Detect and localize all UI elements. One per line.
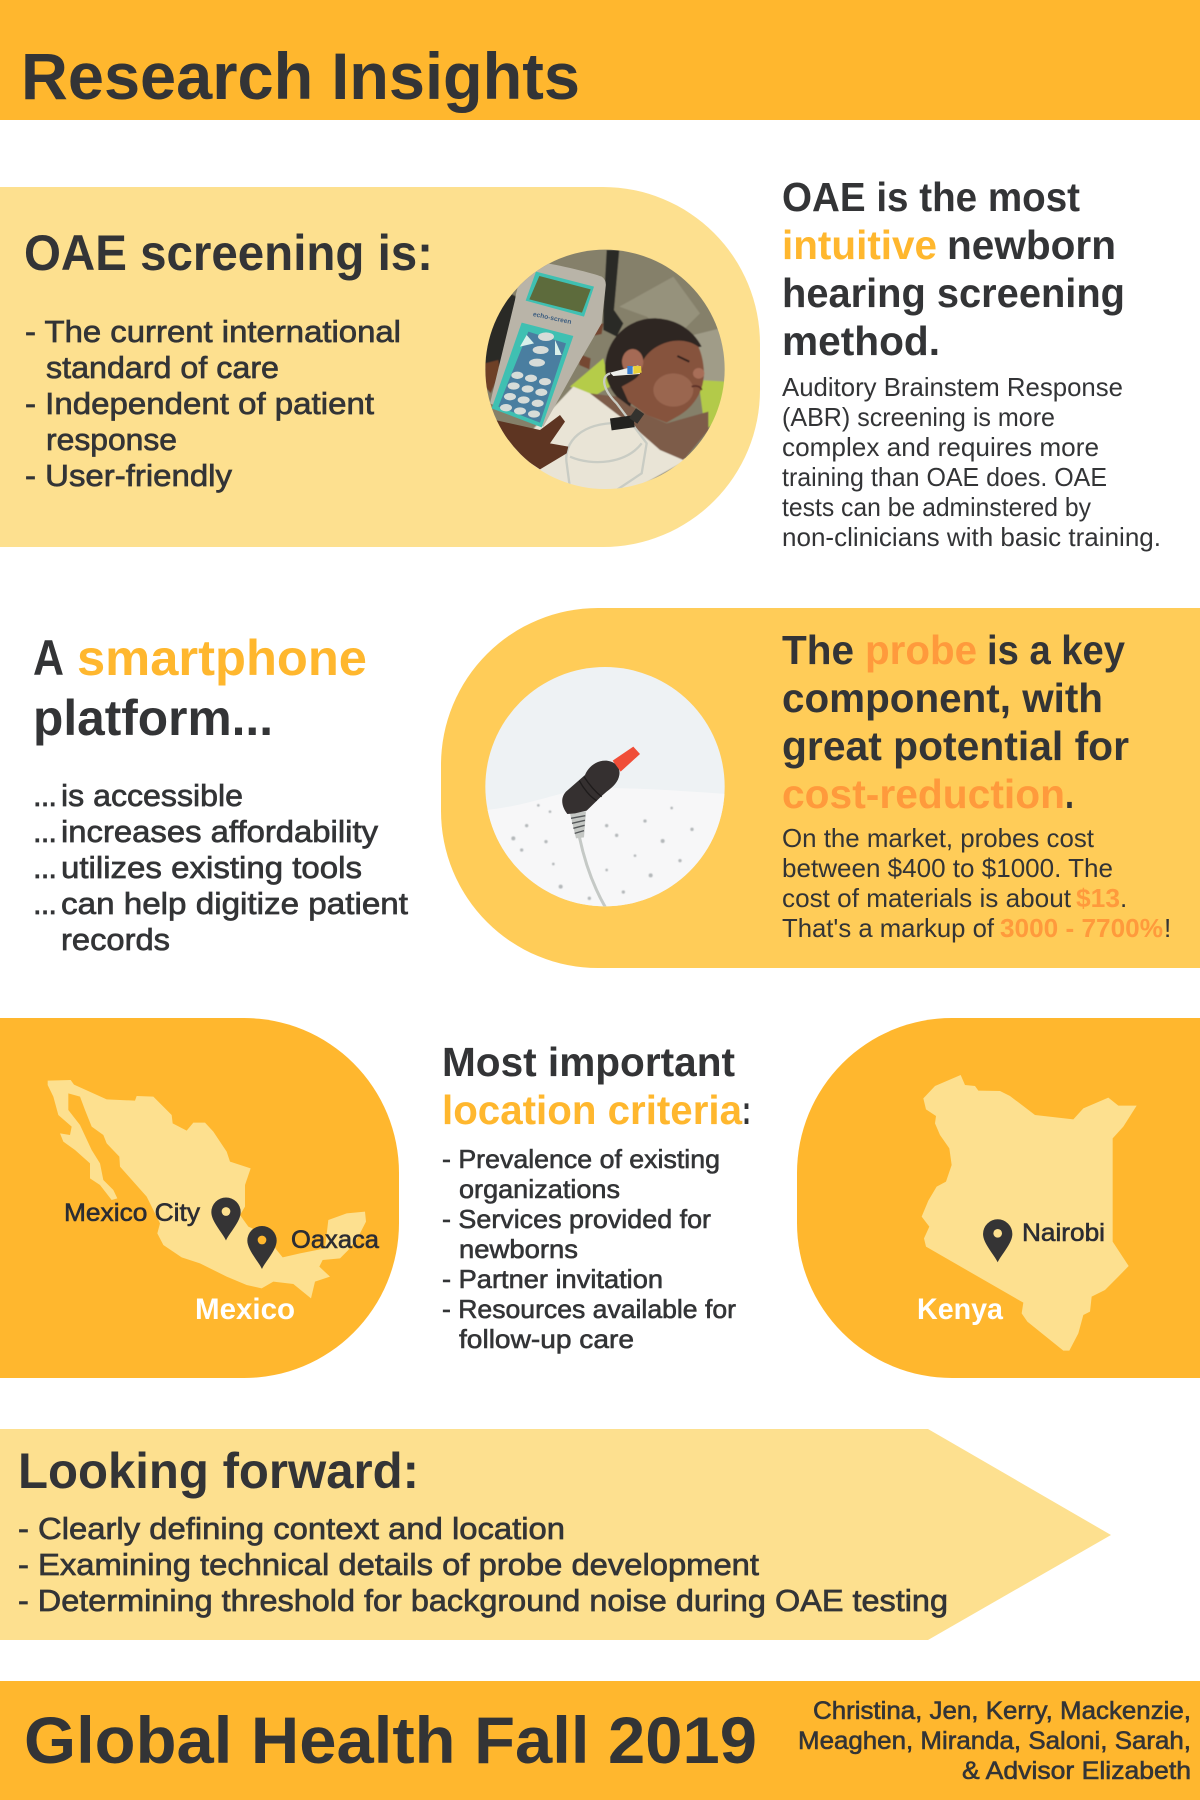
- heading: probe key component: component, with: [782, 675, 1103, 721]
- heading: smartphone platform: smartphone: [77, 630, 367, 686]
- paragraph: ABR comparison: tests can be adminstered by: [782, 492, 1091, 522]
- credits: Meaghen, Miranda, Saloni, Sarah,: [798, 1727, 1191, 1755]
- photo: baby receiving OAE screening: echo-screen: [532, 311, 572, 326]
- list: next steps: - Examining technical details of probe development: [18, 1547, 759, 1582]
- label: Oaxaca: Oaxaca: [291, 1226, 379, 1254]
- heading: smartphone platform: platform...: [33, 690, 273, 746]
- panel: probe: [441, 608, 1200, 968]
- credits: [798, 1697, 1191, 1785]
- heading: location criteria: :: [742, 1087, 751, 1133]
- heading: smartphone platform: A: [33, 630, 64, 686]
- paragraph: probe cost: between $400 to $1000. The: [782, 853, 1113, 883]
- heading: looking forward: Looking forward:: [18, 1443, 419, 1499]
- photo: baby receiving OAE screening: [485, 250, 725, 489]
- list: platform benefits: can help digitize patient: [61, 886, 408, 921]
- paragraph: probe cost: $13: [1076, 883, 1120, 913]
- paragraph: ABR comparison: training than OAE does. OAE: [782, 462, 1107, 492]
- text block: smartphone platform: [33, 630, 408, 957]
- list: OAE screening attributes: standard of care: [46, 350, 279, 385]
- list: location criteria: [442, 1144, 736, 1354]
- list: OAE screening attributes: response: [46, 422, 177, 457]
- heading: probe key component: The: [782, 627, 854, 673]
- heading: probe key component: [782, 627, 1129, 817]
- list: location criteria: organizations: [459, 1174, 620, 1204]
- heading: location criteria: [442, 1039, 751, 1133]
- paragraph: probe cost: [782, 823, 1171, 943]
- heading: OAE most intuitive: intuitive: [782, 222, 937, 268]
- list: platform benefits: ...: [33, 886, 57, 921]
- map: Kenya: [922, 1075, 1137, 1351]
- list: OAE screening attributes: - The current international: [25, 314, 401, 349]
- footer band: [0, 1681, 1200, 1800]
- list: location criteria: - Resources available for: [442, 1294, 736, 1324]
- heading: OAE most intuitive: method.: [782, 318, 940, 364]
- pin: Mexico City: [211, 1198, 241, 1240]
- list: OAE screening attributes: - User-friendly: [25, 458, 233, 493]
- heading: OAE screening is: OAE screening is:: [24, 225, 433, 281]
- heading: location criteria: location criteria: [442, 1087, 743, 1133]
- arrow: looking forward: [0, 1429, 1111, 1640]
- panel: Mexico map: [0, 1018, 399, 1378]
- paragraph: ABR comparison: (ABR) screening is more: [782, 402, 1055, 432]
- text block: OAE intuitive: [782, 174, 1161, 552]
- label: Mexico: Mexico: [195, 1293, 295, 1326]
- panel: Kenya map: [797, 1018, 1200, 1378]
- heading: probe key component: great potential for: [782, 723, 1129, 769]
- heading: location criteria: Most important: [442, 1039, 735, 1085]
- list: next steps: - Determining threshold for background noise during OAE testing: [18, 1583, 948, 1618]
- heading: OAE most intuitive: newborn: [947, 222, 1116, 268]
- heading: probe key component: .: [1065, 771, 1074, 817]
- list: location criteria: - Partner invitation: [442, 1264, 663, 1294]
- list: platform benefits: ...: [33, 778, 57, 813]
- list: platform benefits: ...: [33, 850, 57, 885]
- heading: OAE most intuitive: OAE is the most: [782, 174, 1080, 220]
- photo: OAE probe: [485, 667, 725, 906]
- label: Nairobi: Nairobi: [1022, 1219, 1105, 1247]
- list: OAE screening attributes: - Independent of patient: [25, 386, 374, 421]
- credits: & Advisor Elizabeth: [962, 1757, 1191, 1785]
- paragraph: probe cost: cost of materials is about: [782, 883, 1072, 913]
- paragraph: probe cost: !: [1164, 913, 1171, 943]
- paragraph: probe cost: That's a markup of: [782, 913, 995, 943]
- title: Research Insights: [21, 39, 580, 113]
- list: next steps: - Clearly defining context and location: [18, 1511, 565, 1546]
- credits: Christina, Jen, Kerry, Mackenzie,: [813, 1697, 1191, 1725]
- heading: OAE most intuitive: [782, 174, 1125, 364]
- list: platform benefits: increases affordability: [61, 814, 379, 849]
- list: next steps: [18, 1511, 948, 1618]
- list: platform benefits: [33, 778, 408, 957]
- text block: location criteria: [442, 1039, 751, 1354]
- list: platform benefits: ...: [33, 814, 57, 849]
- paragraph: probe cost: On the market, probes cost: [782, 823, 1095, 853]
- list: location criteria: - Services provided for: [442, 1204, 711, 1234]
- list: platform benefits: utilizes existing tools: [61, 850, 362, 885]
- label: Mexico City: Mexico City: [64, 1199, 201, 1227]
- list: platform benefits: is accessible: [61, 778, 243, 813]
- heading: probe key component: is a key: [987, 627, 1125, 673]
- list: location criteria: newborns: [459, 1234, 578, 1264]
- paragraph: probe cost: 3000 - 7700%: [1000, 913, 1163, 943]
- list: platform benefits: records: [61, 922, 170, 957]
- pin: Oaxaca: [247, 1226, 277, 1269]
- heading: probe key component: cost-reduction: [782, 771, 1065, 817]
- panel: OAE screening: [0, 187, 760, 547]
- list: location criteria: follow-up care: [459, 1324, 634, 1354]
- map: Mexico: [48, 1080, 366, 1298]
- footer title: Global Health Fall 2019: [24, 1703, 757, 1777]
- heading: probe key component: probe: [865, 627, 977, 673]
- label: Kenya: Kenya: [917, 1293, 1003, 1326]
- paragraph: probe cost: .: [1120, 883, 1127, 913]
- paragraph: ABR comparison: Auditory Brainstem Response: [782, 372, 1123, 402]
- heading: smartphone platform: [33, 630, 367, 746]
- paragraph: ABR comparison: complex and requires more: [782, 432, 1099, 462]
- pin: Nairobi: [983, 1219, 1012, 1262]
- paragraph: ABR comparison: [782, 372, 1161, 552]
- list: OAE screening attributes: [25, 314, 401, 493]
- heading: OAE most intuitive: hearing screening: [782, 270, 1125, 316]
- list: location criteria: - Prevalence of existing: [442, 1144, 720, 1174]
- header band: [0, 0, 1200, 120]
- paragraph: ABR comparison: non-clinicians with basic training.: [782, 522, 1161, 552]
